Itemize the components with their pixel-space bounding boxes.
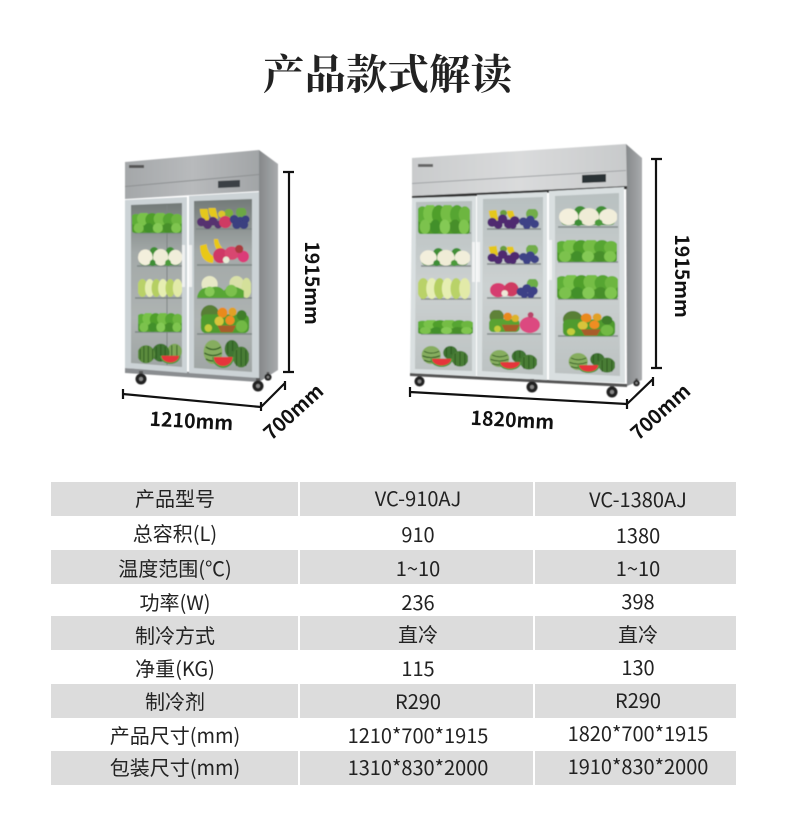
- row: total capacity: 910: [401, 519, 435, 548]
- row: net weight: [135, 652, 655, 682]
- row: product size: [110, 718, 708, 749]
- row: temperature range: 1~10: [396, 553, 440, 582]
- row: power: 236: [401, 587, 435, 616]
- row: temperature range: [51, 550, 736, 584]
- display: [582, 174, 606, 183]
- title: 产品款式解读: [263, 41, 513, 101]
- row: temperature range: 1~10: [616, 553, 660, 582]
- row: cooling method: 直冷: [398, 619, 438, 648]
- casters: [136, 371, 272, 392]
- height label: 1915mm: [669, 234, 698, 318]
- dimension lines: three-door fridge: [410, 159, 662, 409]
- display: [218, 180, 240, 188]
- row: refrigerant: 制冷剂: [145, 686, 205, 715]
- row: net weight: 115: [401, 653, 435, 682]
- product image: two-door fridge: [125, 150, 278, 392]
- depth label: 700mm: [256, 376, 329, 446]
- right side panel: [626, 144, 642, 386]
- row: package size: 包装尺寸(mm): [110, 752, 240, 781]
- row: power: 功率(W): [139, 587, 211, 616]
- row: power: [139, 586, 655, 616]
- left door: [125, 197, 187, 373]
- left door: [410, 196, 476, 376]
- dimension lines: two-door fridge: [123, 172, 294, 411]
- top panel: [412, 144, 627, 197]
- top panel: [125, 150, 259, 199]
- row: model: VC-1380AJ: [589, 484, 687, 513]
- row: total capacity: [133, 518, 660, 549]
- product image: three-door fridge: [410, 144, 642, 398]
- row: refrigerant: R290: [615, 685, 661, 714]
- right side panel: [259, 150, 278, 382]
- casters: [414, 374, 640, 398]
- middle door: [477, 192, 547, 380]
- row: cooling method: 直冷: [618, 619, 658, 648]
- row: package size: [51, 751, 736, 785]
- row: net weight: 净重(KG): [135, 653, 215, 682]
- row: model: VC-910AJ: [375, 483, 461, 512]
- depth label: 700mm: [623, 376, 696, 446]
- brand logo: [418, 164, 433, 167]
- row: cooling method: 制冷方式: [135, 620, 215, 649]
- row: cooling method: [51, 616, 736, 650]
- row: product size: 1820*700*1915: [568, 718, 708, 747]
- brand logo: [129, 165, 144, 168]
- row: model: [51, 482, 736, 516]
- row: total capacity: 1380: [616, 520, 660, 549]
- row: model: 产品型号: [135, 483, 215, 512]
- specification table: [51, 482, 736, 785]
- row: temperature range: 温度范围(℃): [118, 553, 232, 582]
- row: total capacity: 总容积(L): [133, 518, 217, 547]
- row: product size: 产品尺寸(mm): [110, 720, 240, 749]
- row: refrigerant: [51, 684, 736, 718]
- row: package size: 1910*830*2000: [568, 751, 708, 780]
- row: refrigerant: R290: [395, 686, 441, 715]
- row: package size: 1310*830*2000: [348, 752, 488, 781]
- width label: 1210mm: [149, 403, 234, 436]
- width label: 1820mm: [470, 402, 555, 435]
- row: net weight: 130: [621, 652, 655, 681]
- right door: [549, 187, 625, 383]
- row: power: 398: [621, 586, 655, 615]
- row: product size: 1210*700*1915: [348, 720, 488, 749]
- right door: [189, 192, 259, 378]
- height label: 1915mm: [299, 241, 328, 325]
